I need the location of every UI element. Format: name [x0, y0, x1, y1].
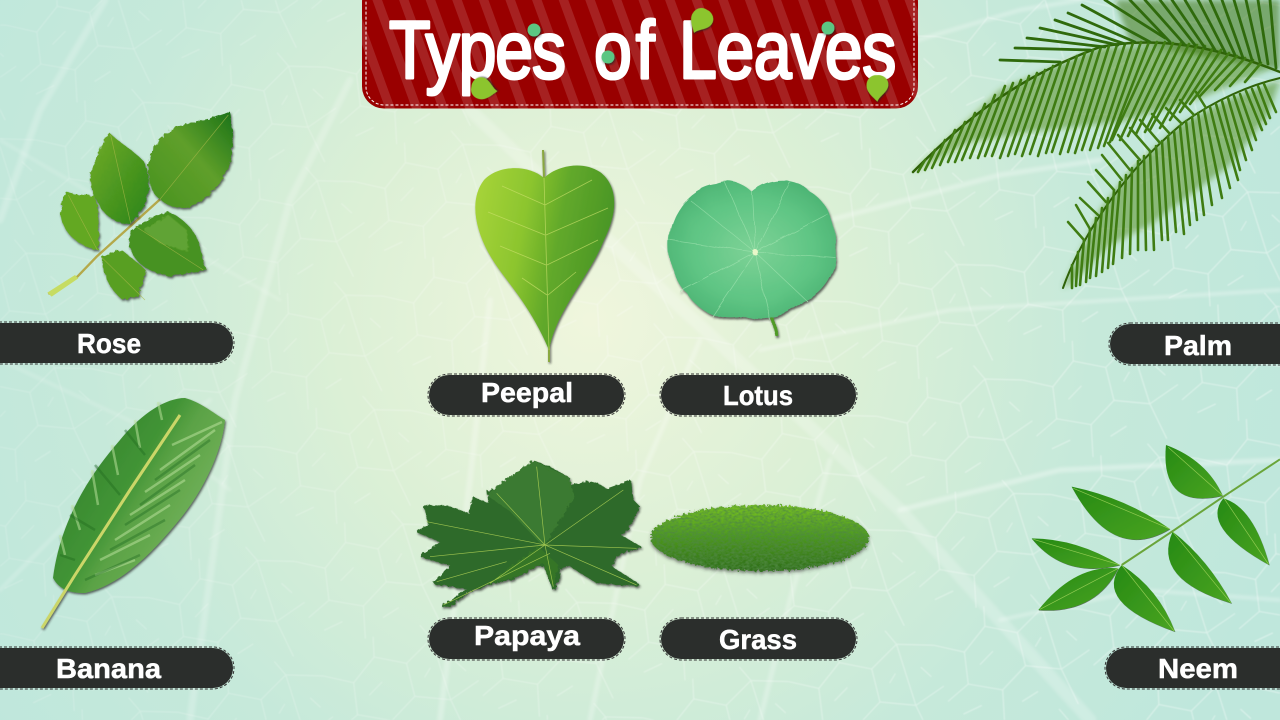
pill label: grass: Grass: [719, 624, 797, 655]
leaf: papaya: [418, 462, 640, 606]
pill label: neem: Neem: [1158, 653, 1238, 684]
leaf: banana: [42, 398, 225, 628]
leaf: grass: [651, 505, 869, 571]
leaf: neem: [1032, 445, 1280, 632]
leaf: lotus: [668, 181, 837, 335]
pill label: grass: [660, 618, 857, 660]
pill label: palm: Palm: [1164, 330, 1232, 361]
rose right leaflet: [129, 212, 207, 277]
pill label: rose: Rose: [77, 328, 141, 359]
title decorations: small leaves: [469, 4, 889, 103]
pill label: palm: [1109, 323, 1280, 365]
title text: Leaves: [679, 4, 896, 95]
palm upper frond: [913, 0, 1280, 172]
title banner: [362, 0, 918, 108]
rose lower leaflet: [102, 250, 147, 299]
pill label: peepal: [428, 374, 625, 416]
rose left leaflet: [61, 192, 99, 250]
title text: of: [594, 4, 659, 95]
leaf: rose: [47, 112, 233, 300]
neem leaflets: [1165, 445, 1223, 498]
pill label: papaya: [428, 618, 625, 660]
pill label: banana: [0, 647, 234, 689]
rose upper leaflet: [91, 133, 149, 224]
leaf: palm: [913, 0, 1280, 288]
pill label: peepal: Peepal: [481, 377, 573, 408]
rose upper right leaflet: [148, 112, 233, 208]
pill label: neem: [1105, 647, 1280, 689]
pill label: rose: [0, 322, 234, 364]
pill label: lotus: [660, 374, 857, 416]
pill label: banana: Banana: [56, 653, 161, 684]
pill label: lotus: Lotus: [723, 380, 793, 411]
palm lower frond: [1063, 78, 1280, 288]
pill label: papaya: Papaya: [474, 620, 580, 651]
title text: Types: [389, 4, 565, 95]
leaf: peepal: [475, 150, 614, 362]
